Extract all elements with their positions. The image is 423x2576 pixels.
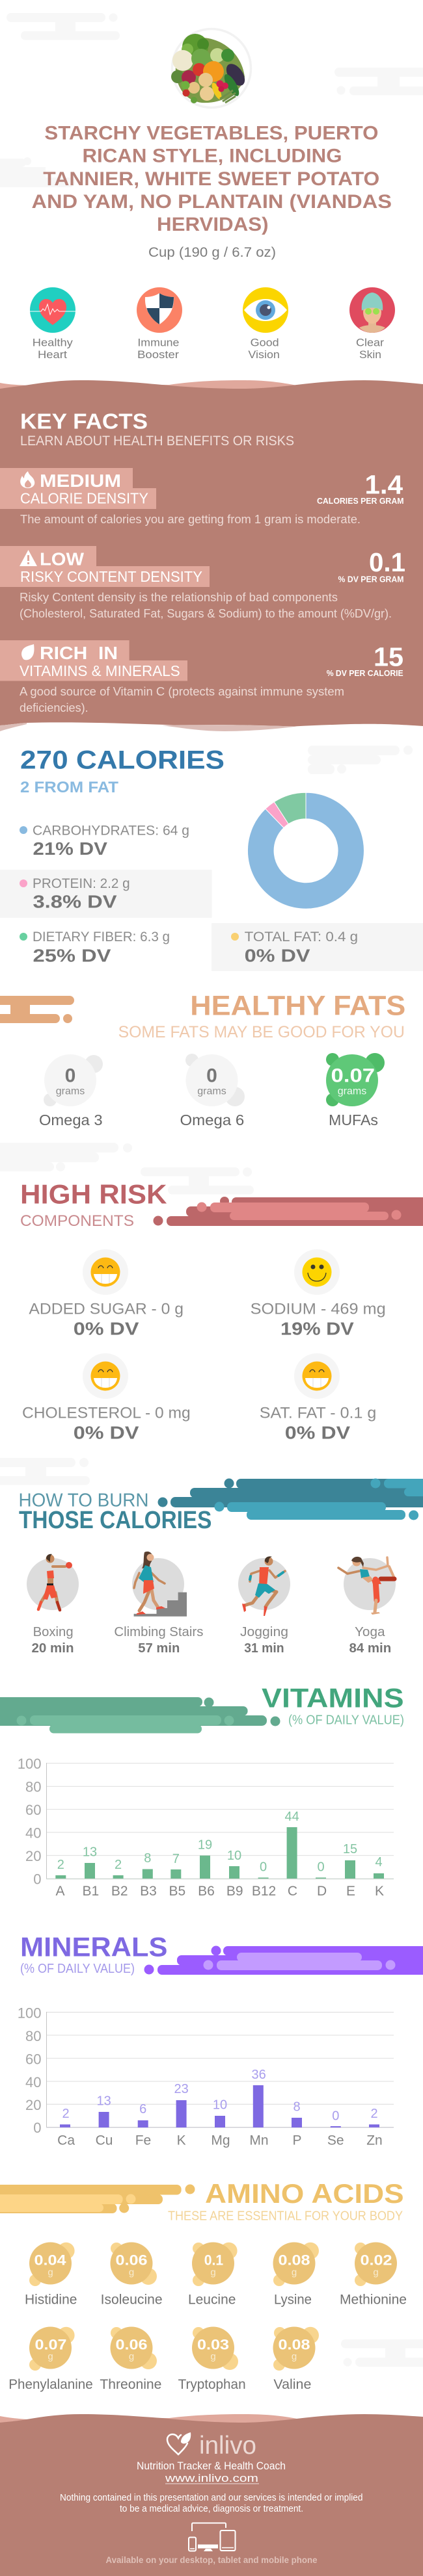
bar chart: vitamins: A	[55, 1884, 65, 1899]
amino: isoleucine: 0.06	[116, 2252, 147, 2269]
macro: dietary fiber: 25% DV	[33, 945, 111, 965]
title: HERVIDAS)	[157, 214, 268, 235]
title: AND YAM, NO PLANTAIN (VIANDAS	[31, 191, 392, 213]
footer: disclaimer	[60, 2493, 363, 2514]
bar chart: minerals: 8	[293, 2100, 301, 2114]
heading: calories	[20, 746, 225, 796]
benefit: good vision: Vision	[248, 348, 280, 361]
fact: risky content density: 0.1	[369, 547, 405, 577]
exercise: climbing stairs: 57 min	[138, 1641, 180, 1656]
bar chart: minerals: 60	[25, 2051, 42, 2067]
benefit: immune booster	[137, 287, 182, 361]
risk: cholesterol: CHOLESTEROL - 0 mg	[22, 1405, 191, 1422]
bar chart: minerals: 0	[332, 2109, 339, 2124]
heading: high risk components: HIGH RISK	[20, 1179, 167, 1210]
bar chart: minerals: 2	[62, 2107, 70, 2121]
risk: saturated fat: 0% DV	[285, 1422, 350, 1442]
bar chart: vitamins: B12	[252, 1884, 276, 1899]
fat: mufas	[326, 1053, 385, 1128]
bar chart: minerals: Ca	[57, 2133, 75, 2148]
title: STARCHY VEGETABLES, PUERTO	[44, 123, 378, 144]
benefit: healthy heart: Healthy	[33, 337, 73, 349]
bar chart: minerals: Se	[327, 2133, 344, 2148]
amino: threonine: g	[129, 2351, 134, 2362]
bar chart: vitamins: B5	[169, 1884, 185, 1899]
heading: healthy fats: HEALTHY FATS	[190, 991, 405, 1022]
amino: threonine	[100, 2327, 161, 2392]
benefit: clear skin: Clear	[356, 337, 384, 349]
amino: isoleucine: Isoleucine	[101, 2293, 163, 2308]
title: TANNIER, WHITE SWEET POTATO	[43, 168, 379, 190]
bar chart: vitamins: B2	[111, 1884, 128, 1899]
bar chart: vitamins: 19	[198, 1838, 212, 1853]
amino: tryptophan: Tryptophan	[178, 2377, 246, 2392]
fact: calorie density: CALORIE DENSITY	[20, 490, 148, 507]
heading: vitamins	[0, 1682, 404, 1733]
bar chart: vitamins: 44	[284, 1810, 299, 1824]
logo: inlivo	[167, 2432, 256, 2460]
risk: sodium: SODIUM - 469 mg	[251, 1301, 386, 1318]
bar chart: vitamins: 8	[144, 1851, 151, 1866]
heading: vitamins: VITAMINS	[262, 1682, 404, 1713]
bar chart: vitamins: 100	[18, 1756, 42, 1772]
benefit: clear skin: Skin	[359, 348, 381, 361]
amino: histidine: 0.04	[34, 2252, 66, 2269]
bar chart: vitamins: B3	[140, 1884, 157, 1899]
heading: how to burn those calories: THOSE CALORIES	[19, 1507, 212, 1534]
bar chart: minerals: 6	[139, 2102, 146, 2116]
macro: protein: 3.8% DV	[33, 892, 117, 912]
exercise: boxing: Boxing	[33, 1625, 74, 1639]
hero image: vegetables	[171, 29, 251, 108]
bar chart: vitamins: 0	[317, 1860, 325, 1875]
bar chart: minerals: 100	[18, 2005, 42, 2022]
heading: amino acids: THESE ARE ESSENTIAL FOR YOUR BODY	[168, 2209, 403, 2223]
risk: sodium	[251, 1249, 386, 1338]
macro: total fat: TOTAL FAT: 0.4 g	[245, 930, 358, 944]
heading: key facts: KEY FACTS	[20, 409, 148, 433]
footer: disclaimer: Nothing contained in this presentation and our services is intended or implied	[60, 2493, 363, 2503]
heading: key facts	[20, 409, 294, 449]
bar chart: minerals: 80	[25, 2028, 42, 2044]
heading: minerals: MINERALS	[20, 1931, 167, 1962]
fat: omega 3: 0	[65, 1065, 75, 1086]
heading: calories: 2 FROM FAT	[20, 779, 118, 796]
amino: leucine: 0.1	[204, 2252, 223, 2269]
risk: saturated fat	[260, 1353, 376, 1442]
fat: mufas: MUFAs	[329, 1112, 378, 1128]
bar chart: vitamins: C	[288, 1884, 297, 1899]
fact: risky content density: % DV PER GRAM	[338, 574, 403, 584]
bar chart: minerals: K	[177, 2133, 186, 2148]
fact: calorie density: The amount of calories you are getting from 1 gram is moderate.	[20, 513, 361, 526]
benefit: healthy heart	[30, 287, 82, 361]
amino: histidine	[25, 2243, 77, 2308]
bar chart: minerals: 20	[25, 2097, 42, 2113]
risk: cholesterol: 0% DV	[74, 1422, 139, 1442]
amino: isoleucine	[101, 2243, 163, 2308]
benefit: immune booster: Immune	[137, 337, 179, 349]
amino: leucine: g	[210, 2267, 216, 2278]
bar chart: vitamins: E	[346, 1884, 355, 1899]
exercise: jogging	[238, 1556, 290, 1656]
fact: risky content density: RISKY CONTENT DENSITY	[20, 568, 202, 585]
amino: isoleucine: g	[129, 2267, 134, 2278]
fat: mufas: grams	[338, 1086, 366, 1097]
bar chart: minerals: 23	[174, 2082, 189, 2096]
amino: phenylalanine	[8, 2327, 93, 2392]
exercise: jogging: 31 min	[244, 1641, 284, 1656]
bar chart: minerals: 40	[25, 2074, 42, 2090]
bar chart: minerals: Mn	[249, 2133, 269, 2148]
bar chart: vitamins: B1	[82, 1884, 99, 1899]
macro: dietary fiber: DIETARY FIBER: 6.3 g	[33, 930, 170, 944]
heading: key facts: LEARN ABOUT HEALTH BENEFITS OR RISKS	[20, 434, 294, 449]
title: RICAN STYLE, INCLUDING	[82, 146, 342, 167]
risk: added sugar: ADDED SUGAR - 0 g	[29, 1301, 184, 1318]
bar chart: minerals: Zn	[366, 2133, 383, 2148]
bar chart: minerals: 0	[33, 2120, 42, 2136]
benefit: immune booster: Booster	[137, 348, 179, 361]
bar chart: vitamins	[18, 1756, 394, 1899]
bar chart: vitamins: B6	[198, 1884, 215, 1899]
icon: devices	[189, 2523, 236, 2551]
bar chart: vitamins: 2	[115, 1858, 122, 1872]
fat: omega 6: Omega 6	[180, 1112, 244, 1128]
benefit: clear skin	[349, 287, 395, 361]
exercise: jogging: Jogging	[240, 1625, 288, 1639]
bar chart: vitamins: 0	[260, 1860, 267, 1875]
amino: lysine: 0.08	[279, 2252, 310, 2269]
fact: risky content density: LOW	[40, 549, 85, 569]
risk: added sugar	[29, 1249, 184, 1338]
fact: vitamins and minerals: A good source of Vitamin C (protects against immune system	[20, 685, 344, 698]
macro: carbohydrates	[20, 823, 189, 859]
bar chart: vitamins: 7	[172, 1852, 180, 1866]
macro: protein	[0, 870, 212, 918]
amino: phenylalanine: 0.07	[35, 2336, 66, 2352]
bar chart: vitamins: K	[375, 1884, 384, 1899]
fact: calorie density	[0, 468, 403, 526]
fact: calorie density: MEDIUM	[40, 471, 121, 491]
footer: availability note: Available on your desktop, tablet and mobile phone	[105, 2555, 318, 2565]
amino: threonine: Threonine	[100, 2377, 161, 2392]
macro: dietary fiber	[20, 930, 170, 965]
amino: lysine	[273, 2243, 319, 2308]
fact: vitamins and minerals: VITAMINS & MINERALS	[20, 662, 180, 679]
amino: histidine: Histidine	[25, 2293, 77, 2308]
bar chart: vitamins: 13	[83, 1845, 97, 1859]
logo: inlivo: inlivo	[199, 2432, 256, 2460]
macro: carbohydrates: CARBOHYDRATES: 64 g	[33, 823, 189, 838]
risk: sodium: 19% DV	[280, 1318, 354, 1338]
fact: vitamins and minerals: % DV PER CALORIE	[327, 668, 403, 678]
benefit: good vision	[243, 287, 288, 361]
fat: omega 3	[39, 1054, 103, 1128]
amino: methionine: 0.02	[361, 2252, 392, 2269]
exercise: yoga: Yoga	[355, 1625, 385, 1639]
heading: minerals	[20, 1931, 423, 1976]
bar chart: minerals: Cu	[96, 2133, 113, 2148]
exercise: yoga: 84 min	[349, 1641, 391, 1656]
bar chart: vitamins: 80	[25, 1778, 42, 1795]
bar chart: vitamins: D	[317, 1884, 327, 1899]
bar chart: minerals: Mg	[211, 2133, 230, 2148]
panel: key facts	[0, 380, 423, 731]
amino: phenylalanine: g	[48, 2351, 53, 2362]
amino: valine: 0.08	[279, 2336, 310, 2352]
bar chart: vitamins: 40	[25, 1825, 42, 1841]
amino: leucine	[188, 2243, 238, 2308]
bar chart: vitamins: 60	[25, 1802, 42, 1818]
fact: vitamins and minerals: RICH IN	[40, 643, 118, 663]
fat: omega 6: 0	[206, 1065, 217, 1086]
bar chart: minerals: 36	[251, 2068, 266, 2082]
fat: omega 3: Omega 3	[39, 1112, 103, 1128]
risk: cholesterol	[22, 1353, 191, 1442]
bar chart: minerals: 10	[213, 2098, 227, 2113]
amino: tryptophan: 0.03	[197, 2336, 229, 2352]
footer: disclaimer: to be a medical advice, diagnosis or treatment.	[120, 2504, 303, 2514]
bar chart: minerals	[18, 2005, 394, 2148]
serving size: Cup (190 g / 6.7 oz)	[148, 245, 276, 260]
bar chart: vitamins: 15	[343, 1842, 357, 1856]
heading: minerals: (% OF DAILY VALUE)	[20, 1962, 135, 1976]
macro: total fat: 0% DV	[245, 945, 310, 965]
amino: histidine: g	[48, 2267, 53, 2278]
bar chart: vitamins: 4	[375, 1855, 383, 1869]
bar chart: vitamins: 20	[25, 1848, 42, 1864]
amino: methionine: Methionine	[340, 2293, 407, 2308]
benefit: healthy heart: Heart	[38, 348, 67, 361]
fat: omega 6	[180, 1054, 245, 1128]
amino: valine	[273, 2327, 319, 2392]
amino: tryptophan: g	[210, 2351, 216, 2362]
amino: valine: g	[292, 2351, 297, 2362]
bar chart: minerals: Fe	[135, 2133, 151, 2148]
risk: added sugar: 0% DV	[74, 1318, 139, 1338]
heading: amino acids	[0, 2178, 404, 2223]
bar chart: minerals: 13	[96, 2094, 111, 2109]
exercise: climbing stairs: Climbing Stairs	[114, 1625, 203, 1639]
bar chart: minerals: 2	[370, 2107, 378, 2121]
amino: methionine: g	[373, 2267, 379, 2278]
bar chart: vitamins: 0	[33, 1871, 42, 1888]
fat: omega 6: grams	[197, 1086, 226, 1097]
fact: vitamins and minerals: 15	[374, 642, 403, 672]
macro: total fat	[212, 923, 423, 971]
amino: lysine: g	[292, 2267, 297, 2278]
heading: healthy fats: SOME FATS MAY BE GOOD FOR YOU	[118, 1023, 405, 1041]
heading: high risk components	[20, 1179, 423, 1230]
amino: tryptophan	[178, 2327, 246, 2392]
risk: saturated fat: SAT. FAT - 0.1 g	[260, 1405, 376, 1422]
exercise: yoga	[338, 1557, 396, 1656]
benefit: good vision: Good	[251, 337, 279, 349]
macro: protein: PROTEIN: 2.2 g	[33, 876, 130, 891]
macro: carbohydrates: 21% DV	[33, 839, 107, 859]
exercise: boxing: 20 min	[31, 1641, 74, 1656]
exercise: boxing	[27, 1554, 79, 1656]
fat: omega 3: grams	[56, 1086, 85, 1097]
amino: lysine: Lysine	[274, 2293, 312, 2308]
exercise: climbing stairs	[114, 1552, 203, 1656]
fact: vitamins and minerals	[0, 640, 403, 714]
bar chart: vitamins: 2	[57, 1858, 64, 1872]
donut chart: macronutrients	[247, 792, 364, 909]
bar chart: vitamins: B9	[226, 1884, 243, 1899]
heading: how to burn those calories: HOW TO BURN	[18, 1490, 148, 1511]
heading: amino acids: AMINO ACIDS	[205, 2178, 404, 2209]
title	[31, 123, 392, 235]
fact: risky content density: Risky Content density is the relationship of bad components	[20, 591, 338, 604]
heading: calories: 270 CALORIES	[20, 746, 225, 775]
amino: valine: Valine	[273, 2377, 311, 2392]
fat: mufas: 0.07	[331, 1065, 375, 1086]
amino: threonine: 0.06	[116, 2336, 147, 2352]
bar chart: minerals: P	[292, 2133, 302, 2148]
bar chart: vitamins: 10	[227, 1849, 241, 1863]
amino: phenylalanine: Phenylalanine	[8, 2377, 93, 2392]
footer: website link: www.inlivo.com	[165, 2472, 258, 2484]
heading: high risk components: COMPONENTS	[20, 1212, 134, 1230]
footer: tagline: Nutrition Tracker & Health Coach	[137, 2460, 286, 2472]
fact: risky content density	[0, 546, 405, 620]
fact: calorie density: CALORIES PER GRAM	[317, 496, 403, 506]
fact: risky content density: (Cholesterol, Saturated Fat, Sugars & Sodium) to the amount (%DV/gr).	[20, 607, 392, 620]
heading: healthy fats	[0, 991, 405, 1041]
heading: how to burn those calories	[18, 1478, 423, 1534]
amino: methionine	[340, 2243, 407, 2308]
heading: vitamins: (% OF DAILY VALUE)	[288, 1713, 404, 1727]
footer panel	[0, 2414, 423, 2576]
fact: vitamins and minerals: deficiencies).	[20, 701, 89, 714]
amino: leucine: Leucine	[188, 2293, 236, 2308]
fact: calorie density: 1.4	[364, 470, 403, 500]
